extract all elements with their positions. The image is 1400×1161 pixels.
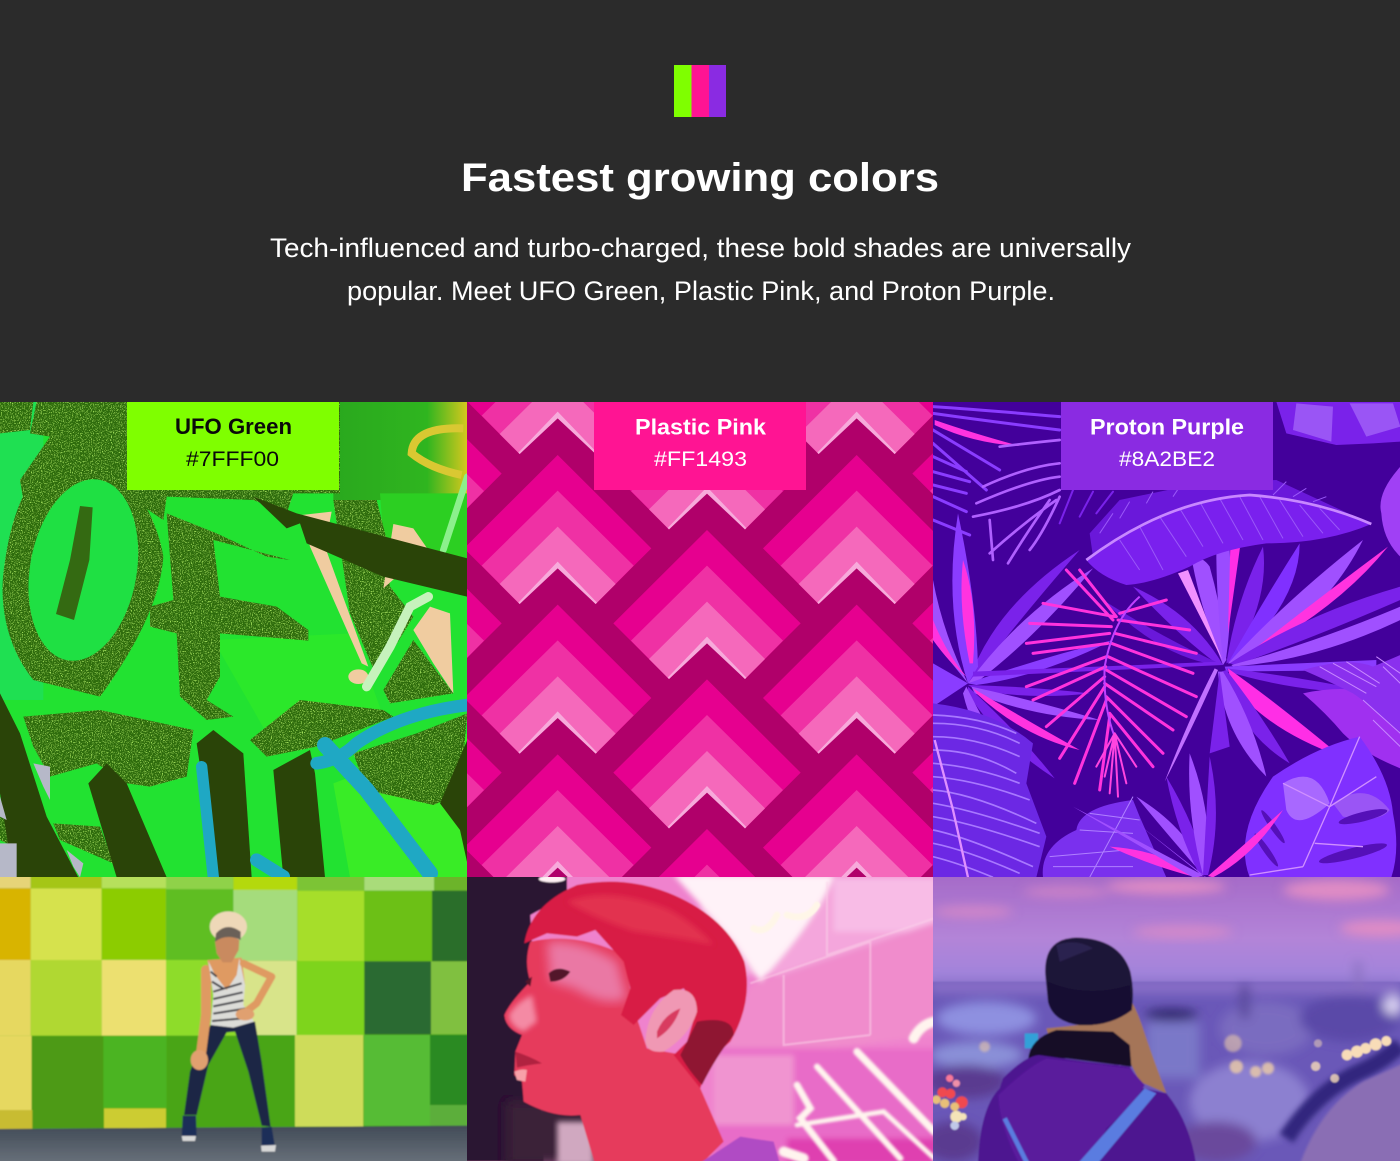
blue paint xyxy=(202,705,467,877)
shirt xyxy=(697,1137,780,1161)
wall checker squares xyxy=(0,875,471,1129)
label: UFO Green: UFO Green xyxy=(175,414,292,439)
face and neck xyxy=(504,939,724,1161)
label: Proton Purple: Proton Purple xyxy=(1090,414,1244,440)
panel: Plastic Pink chevron pattern xyxy=(467,402,933,877)
star C foreground xyxy=(1110,847,1203,877)
pink frond xyxy=(1026,570,1196,790)
eye and mouth xyxy=(549,969,570,982)
dark strokes xyxy=(0,497,467,877)
intro text: popular. Meet UFO Green, Plastic Pink, and Proton Purple. xyxy=(347,276,1055,306)
peach strokes xyxy=(302,512,453,693)
pink frond tip fan xyxy=(1096,733,1136,797)
dark background xyxy=(464,875,567,1161)
star A blades xyxy=(973,540,1400,782)
monstera bottom right xyxy=(1245,737,1396,877)
icon: three colour swatch xyxy=(674,65,726,117)
woman from behind xyxy=(978,938,1196,1161)
river bank and hill xyxy=(1286,1045,1400,1138)
monstera bottom left xyxy=(1043,800,1166,877)
label: UFO Green xyxy=(127,402,339,490)
woman xyxy=(182,911,276,1152)
label: Proton Purple: #8A2BE2 xyxy=(1119,448,1215,471)
panel: Plastic Pink photo, portrait with neon xyxy=(464,875,938,1161)
ear xyxy=(645,990,697,1052)
top right monstera xyxy=(1276,402,1400,445)
intro text: Tech-influenced and turbo-charged, these bold shades are universally xyxy=(270,233,1132,263)
title: Fastest growing colors xyxy=(461,156,939,200)
clouds xyxy=(933,879,1400,938)
star C blades xyxy=(1136,753,1216,875)
lower left frond xyxy=(933,703,1046,877)
panel: UFO Green photo, woman against checker wall xyxy=(0,875,471,1161)
neon wall xyxy=(674,875,938,1161)
banana leaf xyxy=(1090,480,1350,554)
label: UFO Green: #7FFF00 xyxy=(186,448,279,471)
intro text xyxy=(270,233,1132,306)
star B blades xyxy=(933,513,1113,793)
label: Proton Purple xyxy=(1061,402,1273,490)
label: Plastic Pink: #FF1493 xyxy=(654,448,747,471)
right side leaves xyxy=(1303,689,1400,768)
header background xyxy=(0,0,1400,402)
panel: Proton Purple photo, woman overlooking city xyxy=(923,875,1400,1161)
hair xyxy=(524,882,747,1088)
pavement xyxy=(0,1126,471,1161)
yellow swirl xyxy=(412,428,463,475)
bokeh lights xyxy=(932,1035,1391,1130)
blurred city xyxy=(930,982,1400,1161)
O inner xyxy=(28,479,138,661)
top-left fronds xyxy=(933,407,1060,535)
panel: Proton Purple tropical leaves xyxy=(933,400,1400,877)
label: Plastic Pink xyxy=(594,402,806,490)
label: Plastic Pink: Plastic Pink xyxy=(635,414,767,440)
panel: UFO Green graffiti texture xyxy=(0,400,467,877)
